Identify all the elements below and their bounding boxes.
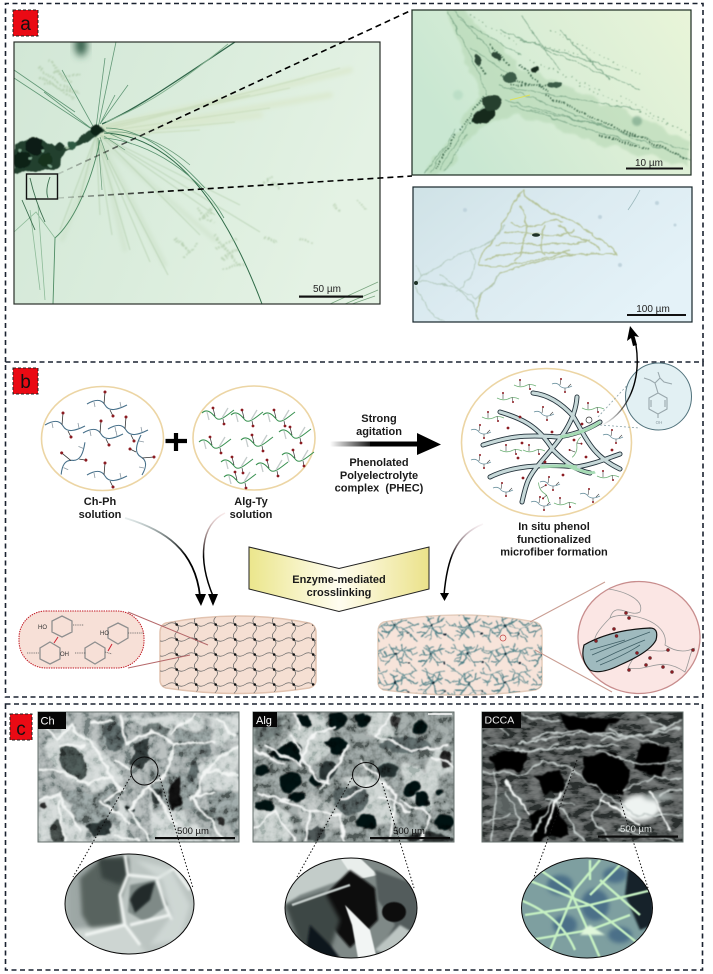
scale bar 10 µm: 10 µm <box>635 158 663 169</box>
badge c <box>10 714 32 740</box>
micrograph outline <box>14 42 380 304</box>
micrograph: radial fibre network <box>13 34 380 304</box>
scale bar 50 µm <box>299 284 363 298</box>
callout: phenol crosslinks: HO <box>38 625 47 631</box>
label PHEC: Phenolated <box>349 457 409 469</box>
inset outline <box>412 10 691 175</box>
zoom selection box <box>26 174 58 199</box>
frame of panel a <box>6 4 703 362</box>
oval zoom: Alg <box>285 858 417 958</box>
inset micrograph: fibre net <box>413 187 692 322</box>
label Ch-Ph solution: solution <box>79 509 122 521</box>
scale bar Ch: 500 µm <box>177 826 209 837</box>
arrow: Ch-Ph to network <box>125 518 206 606</box>
scale bar 100 µm: 100 µm <box>636 304 670 315</box>
dotted zoom guides <box>73 760 648 888</box>
oval zoom: DCCA <box>520 858 653 958</box>
badge a <box>13 10 38 36</box>
panel c: SEM images <box>6 704 702 970</box>
circle: Ch-Ph solution chains <box>42 386 164 490</box>
label microfiber formation: microfiber formation <box>500 546 608 558</box>
callout: phenol crosslinks: HO <box>100 631 109 637</box>
frame of panel c <box>6 704 702 970</box>
chevron: enzyme-mediated crosslinking: Enzyme-mediated <box>292 574 386 586</box>
SEM image: Alg <box>253 712 455 843</box>
scale bar DCCA: 500 µm <box>620 824 652 835</box>
scale bar Ch <box>155 826 235 839</box>
label Ch-Ph solution: Ch-Ph <box>84 496 116 508</box>
circle: microfiber formation <box>462 368 632 516</box>
label PHEC: Polyelectrolyte <box>340 470 418 482</box>
cylinder: crosslinked network <box>128 610 316 700</box>
inset micrograph: fibre junction <box>412 10 691 176</box>
image tag DCCA <box>482 712 521 728</box>
callout: phenol crosslinks: OH <box>60 652 69 658</box>
arrow: Alg-Ty to network <box>204 513 225 606</box>
label PHEC: complex (PHEC) <box>335 482 424 494</box>
label microfiber formation: functionalized <box>517 534 591 546</box>
badge c: c <box>16 719 26 740</box>
arrow to lower inset <box>600 326 639 426</box>
scale bar Alg <box>370 826 450 839</box>
image tag Ch <box>38 712 66 729</box>
badge b <box>13 368 38 394</box>
frame of panel b <box>6 362 703 697</box>
label strong agitation: agitation <box>356 426 402 438</box>
lower inset outline <box>413 187 692 322</box>
label strong agitation: Strong <box>361 413 397 425</box>
badge a: a <box>20 14 31 35</box>
SEM image: DCCA <box>482 712 683 842</box>
scale bar Alg: 500 µm <box>393 826 425 837</box>
image tag Alg <box>253 712 277 727</box>
SEM image: Ch <box>38 712 239 844</box>
selection circles <box>131 757 380 788</box>
panel a: optical micrographs <box>6 4 703 362</box>
label Alg-Ty solution: Alg-Ty <box>234 496 269 508</box>
scale bar 50 µm: 50 µm <box>313 284 341 295</box>
magnifier: fibre with chains <box>530 582 700 694</box>
chevron: enzyme-mediated crosslinking <box>249 547 429 612</box>
SEM outlines <box>38 712 683 842</box>
image tag Alg: Alg <box>256 715 272 727</box>
scale bar DCCA <box>598 824 678 838</box>
cylinder: fibre reinforced network <box>377 614 543 696</box>
magnifier: phenol group: OH <box>656 420 662 425</box>
plus sign <box>166 433 187 451</box>
scale bar 10 µm <box>626 158 683 170</box>
callout: phenol crosslinks <box>19 611 144 668</box>
image tag DCCA: DCCA <box>484 714 514 726</box>
image tag Ch: Ch <box>40 716 55 728</box>
arrow: fibers to network <box>440 524 483 601</box>
magnifier: phenol group <box>598 363 692 430</box>
label Alg-Ty solution: solution <box>230 509 273 521</box>
arrow: strong agitation <box>330 433 441 455</box>
scale bar 100 µm <box>627 304 686 316</box>
circle: Alg-Ty solution chains <box>193 386 315 490</box>
chevron: enzyme-mediated crosslinking: crosslinking <box>307 587 371 599</box>
panel b: fabrication schematic <box>6 326 703 708</box>
zoom guide lines <box>58 10 412 198</box>
oval zoom: Ch <box>65 854 195 958</box>
badge b: b <box>20 372 31 393</box>
label microfiber formation: In situ phenol <box>518 521 590 533</box>
